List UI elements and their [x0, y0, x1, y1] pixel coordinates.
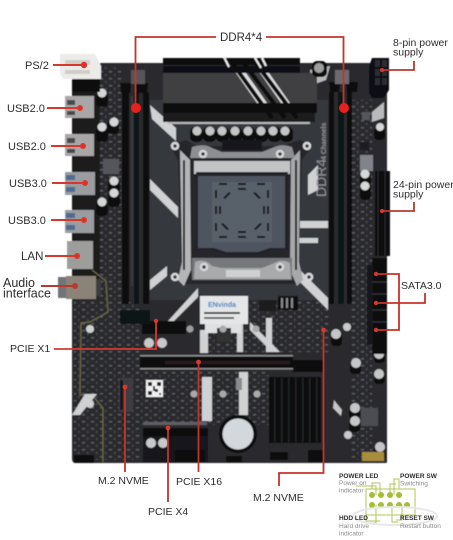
pins	[369, 492, 410, 508]
POWER LED text: POWER LED	[339, 473, 379, 480]
PCIE X1 label: PCIE X1	[10, 343, 50, 355]
8-pin leader	[380, 61, 414, 72]
pin diagram wiring	[356, 479, 415, 523]
USB3.0 leader 2	[51, 218, 86, 222]
diagonal stripes	[72, 105, 328, 421]
DDR4 label: DDR4*4	[220, 32, 263, 44]
PCIE X1 slot	[120, 310, 194, 348]
DDR4 right leader	[266, 37, 349, 113]
POWER SW text: POWER SW	[400, 473, 438, 480]
Audio label: interface	[3, 286, 51, 300]
LAN port	[67, 241, 93, 269]
leader lines	[41, 37, 425, 502]
Restart button: Restart button	[400, 523, 441, 530]
front panel pin diagram	[339, 473, 441, 538]
RESET SW text: RESET SW	[400, 515, 435, 522]
M.2 left leader	[123, 385, 127, 472]
USB2.0 leader 1	[47, 106, 82, 110]
LAN leader	[45, 254, 79, 258]
M.2 left label: M.2 NVME	[98, 475, 149, 487]
white product label: ENvinda	[208, 302, 236, 309]
Audio label: Audio	[3, 276, 35, 290]
Power on indicator: indicator	[339, 488, 364, 494]
USB2.0 leader 2	[51, 144, 85, 148]
right side components	[312, 61, 385, 200]
PS/2 label: PS/2	[25, 60, 49, 72]
PCIE X16 slot	[140, 355, 323, 372]
lower right capacitors	[331, 323, 385, 461]
Audio leader	[41, 284, 77, 288]
PS/2 leader	[53, 63, 86, 67]
Hard drive indicator: indicator	[339, 530, 364, 538]
HDD LED text: HDD LED	[339, 515, 368, 522]
PCB texture	[74, 66, 372, 460]
VRM heatsink	[163, 57, 317, 124]
24-pin label: 24-pin power	[393, 179, 453, 191]
SATA connectors	[367, 258, 387, 354]
M.2 right leader	[279, 328, 326, 486]
PCIE X16 leader	[196, 360, 201, 472]
motherboard	[58, 54, 390, 463]
headers	[220, 296, 298, 332]
Power on indicator: Power on	[339, 480, 367, 487]
24-pin label: supply	[393, 188, 424, 200]
USB2.0 port 1	[65, 96, 94, 118]
PCIE X4 area	[143, 422, 208, 462]
QR code	[146, 380, 163, 397]
8-pin connector	[369, 58, 389, 98]
bottom pin headers	[74, 450, 324, 463]
M.2 slot left	[119, 378, 133, 412]
8-pin label: supply	[393, 46, 424, 58]
RAM slots left	[120, 70, 149, 304]
USB2.0 label 2: USB2.0	[8, 141, 46, 153]
Switching: Switching	[400, 480, 428, 488]
SATA leader	[374, 272, 425, 332]
left caps and chips	[86, 88, 120, 408]
24-pin connector	[375, 171, 390, 256]
PS/2 port	[60, 54, 101, 92]
USB3.0 leader 1	[52, 181, 87, 185]
USB3.0 label 1: USB3.0	[9, 178, 47, 190]
USB2.0 label 1: USB2.0	[7, 103, 45, 115]
capacitors row	[190, 126, 293, 142]
8-pin label: 8-pin power	[393, 37, 448, 49]
SATA label: SATA3.0	[401, 280, 442, 292]
PCIE X16 label: PCIE X16	[176, 476, 222, 488]
Audio port	[58, 276, 101, 299]
USB2.0 port 2	[65, 134, 94, 156]
USB3.0 label 2: USB3.0	[8, 215, 46, 227]
CPU socket LGA	[196, 172, 288, 255]
CMOS battery	[219, 415, 257, 453]
LAN label: LAN	[21, 251, 43, 263]
USB3.0 port 2	[65, 210, 94, 233]
CPU socket bracket	[170, 140, 312, 286]
watermark	[353, 507, 437, 525]
PCIE X4 label: PCIE X4	[148, 506, 188, 518]
24-pin leader	[380, 202, 414, 213]
DDR4 channels silk text	[313, 123, 329, 197]
PCIE X4 leader	[166, 426, 170, 502]
dark panel behind socket	[150, 100, 328, 300]
board PCB	[72, 63, 387, 463]
DDR4 left leader	[131, 37, 216, 113]
white product label	[200, 296, 248, 342]
M.2 right label: M.2 NVME	[253, 492, 304, 504]
DDR4 channels silk text: 4 Channels	[321, 123, 328, 160]
chipset heatsink	[190, 377, 321, 443]
USB3.0 port 1	[65, 172, 95, 195]
RAM slots right	[310, 66, 358, 304]
Hard drive indicator: Hard drive	[339, 523, 369, 530]
DDR4 channels silk text: DDR4	[313, 159, 329, 197]
PCIE X1 leader	[54, 319, 158, 349]
